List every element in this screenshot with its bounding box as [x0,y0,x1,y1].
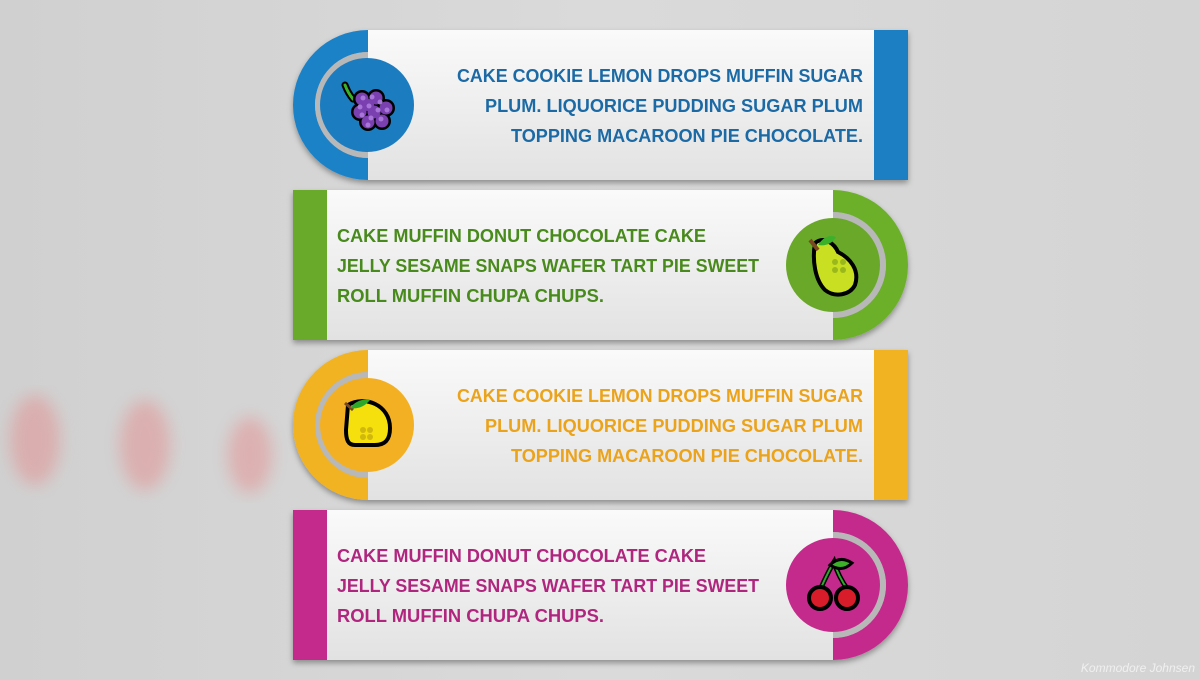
panel 3: yellow lemon [293,350,908,500]
icon: cherries [786,538,880,632]
text block 1: PLUM. LIQUORICE PUDDING SUGAR PLUM [485,96,863,116]
text block 2: JELLY SESAME SNAPS WAFER TART PIE SWEET [337,256,759,276]
text block 3: TOPPING MACAROON PIE CHOCOLATE. [511,446,863,466]
icon: lemon [320,378,414,472]
credit: Kommodore Johnsen [1081,661,1195,675]
icon: grapes [320,58,414,152]
text block 4: ROLL MUFFIN CHUPA CHUPS. [337,606,604,626]
panel 2: green pear [293,190,908,340]
text block 2: ROLL MUFFIN CHUPA CHUPS. [337,286,604,306]
decorative red glows [10,395,272,493]
text block 3 [457,386,863,466]
text block 4: JELLY SESAME SNAPS WAFER TART PIE SWEET [337,576,759,596]
icon: pear [786,218,880,312]
text block 1: CAKE COOKIE LEMON DROPS MUFFIN SUGAR [457,66,863,86]
text block 1 [457,66,863,146]
text block 4: CAKE MUFFIN DONUT CHOCOLATE CAKE [337,546,706,566]
text block 3: CAKE COOKIE LEMON DROPS MUFFIN SUGAR [457,386,863,406]
panel 1: blue grapes [293,30,908,180]
text block 2 [337,226,759,306]
text block 3: PLUM. LIQUORICE PUDDING SUGAR PLUM [485,416,863,436]
panel 4: magenta cherries [293,510,908,660]
text block 4 [337,546,759,626]
text block 1: TOPPING MACAROON PIE CHOCOLATE. [511,126,863,146]
text block 2: CAKE MUFFIN DONUT CHOCOLATE CAKE [337,226,706,246]
